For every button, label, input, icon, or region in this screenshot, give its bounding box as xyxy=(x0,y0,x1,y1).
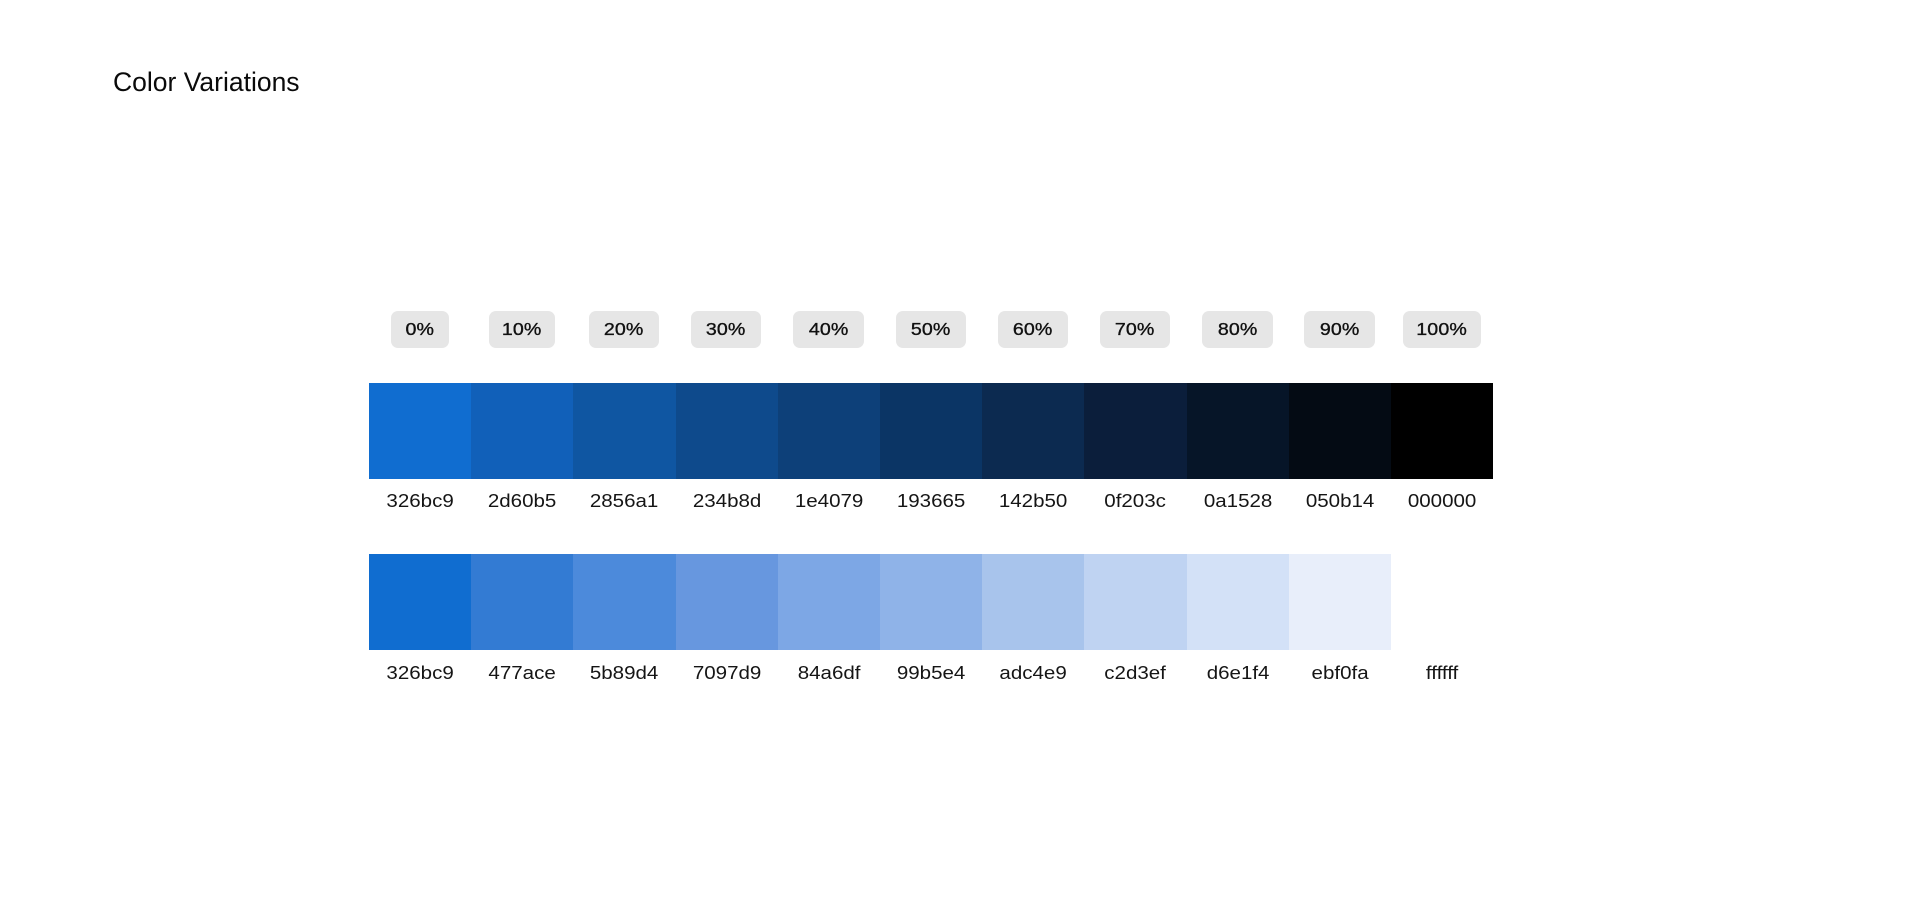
shades hex labels xyxy=(386,491,1476,511)
shades hex labels: 2d60b5 xyxy=(488,491,557,511)
percentage pills: 20% xyxy=(604,319,644,339)
percentage pills xyxy=(391,311,1481,348)
shades hex labels: 1e4079 xyxy=(795,491,863,511)
percentage pills: 100% xyxy=(1417,319,1467,339)
percentage pills: 0% xyxy=(406,319,434,339)
shades hex labels: 050b14 xyxy=(1306,491,1374,511)
percentage pills: 70% xyxy=(1115,319,1155,339)
tints hex labels: ebf0fa xyxy=(1311,663,1368,683)
percentage pills: 90% xyxy=(1320,319,1359,339)
percentage pills: 60% xyxy=(1013,319,1053,339)
shades hex labels: 193665 xyxy=(897,491,965,511)
tints hex labels: 7097d9 xyxy=(692,663,761,683)
shades hex labels: 234b8d xyxy=(692,491,761,511)
percentage pills: 50% xyxy=(911,319,951,339)
tints hex labels: adc4e9 xyxy=(1000,663,1067,683)
tints hex labels: 5b89d4 xyxy=(590,663,659,683)
title: Color Variations xyxy=(113,67,300,97)
tints hex labels: d6e1f4 xyxy=(1206,663,1269,683)
tints swatch row xyxy=(369,554,1391,650)
shades hex labels: 0f203c xyxy=(1105,491,1166,511)
shades hex labels: 326bc9 xyxy=(386,491,454,511)
percentage pills: 80% xyxy=(1218,319,1257,339)
percentage pills: 40% xyxy=(809,319,848,339)
tints hex labels: 84a6df xyxy=(798,663,860,683)
shades hex labels: 000000 xyxy=(1408,491,1476,511)
tints hex labels: 477ace xyxy=(489,663,556,683)
percentage pills: 10% xyxy=(502,319,542,339)
percentage pills: 30% xyxy=(706,319,746,339)
tints hex labels: 326bc9 xyxy=(386,663,454,683)
shades hex labels: 0a1528 xyxy=(1203,491,1272,511)
tints hex labels: ffffff xyxy=(1426,663,1458,683)
shades swatch row xyxy=(369,383,1493,479)
tints hex labels xyxy=(386,663,1458,683)
shades hex labels: 142b50 xyxy=(999,491,1068,511)
shades hex labels: 2856a1 xyxy=(590,491,659,511)
tints hex labels: c2d3ef xyxy=(1105,663,1166,683)
tints hex labels: 99b5e4 xyxy=(897,663,965,683)
